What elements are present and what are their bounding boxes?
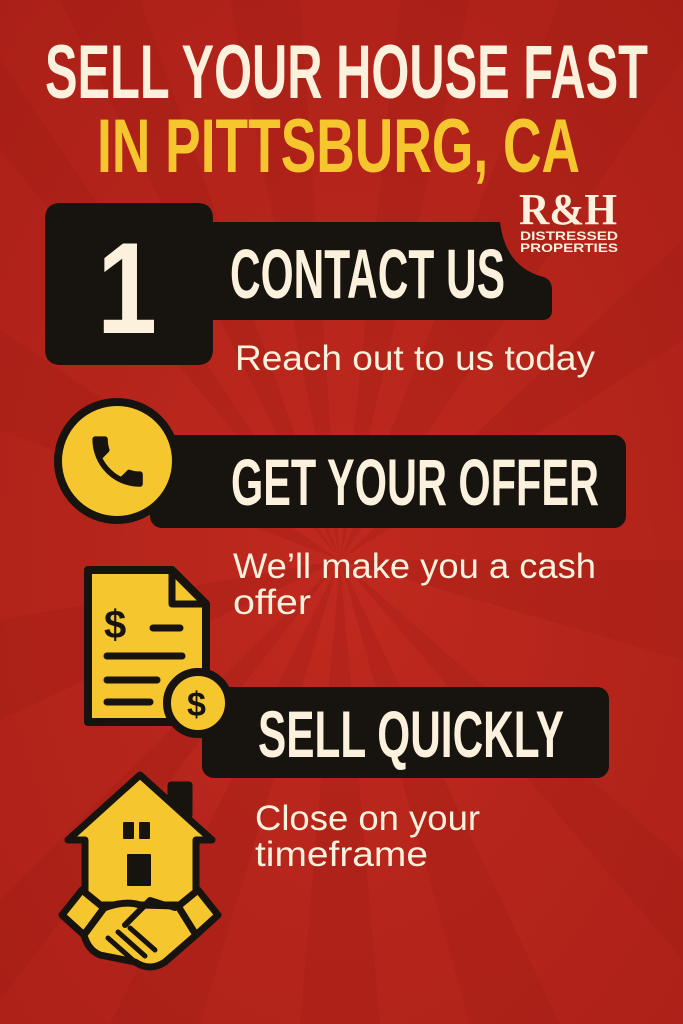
icon: document with coin: $: [187, 686, 206, 724]
text: cash offer: We’ll make you a cash: [233, 547, 596, 586]
text: close on your timeframe: Close on your: [255, 799, 480, 838]
step 3 panel: sell quickly: [202, 687, 609, 778]
step 2 panel: get your offer: [150, 435, 626, 528]
heading: contact us: CONTACT US: [230, 235, 505, 313]
logo: R&H Distressed Properties: [519, 185, 618, 255]
logo: R&H Distressed Properties: PROPERTIES: [520, 241, 618, 255]
text: close on your timeframe: [255, 799, 480, 874]
icon: document with coin: [88, 570, 229, 734]
icon: phone: [58, 402, 176, 520]
number 1: 1: [97, 215, 157, 361]
title: [45, 30, 648, 189]
text: reach out: Reach out to us today: [235, 339, 596, 378]
icon: house with handshake: [62, 775, 218, 967]
text: cash offer: [233, 547, 596, 622]
step 1 panel: contact us: [45, 203, 552, 365]
logo: R&H Distressed Properties: DISTRESSED: [520, 229, 618, 243]
text: close on your timeframe: timeframe: [255, 835, 428, 874]
icon: document with coin: $: [104, 603, 126, 647]
logo: R&H Distressed Properties: R&H: [519, 185, 617, 234]
text: cash offer: offer: [233, 583, 311, 622]
